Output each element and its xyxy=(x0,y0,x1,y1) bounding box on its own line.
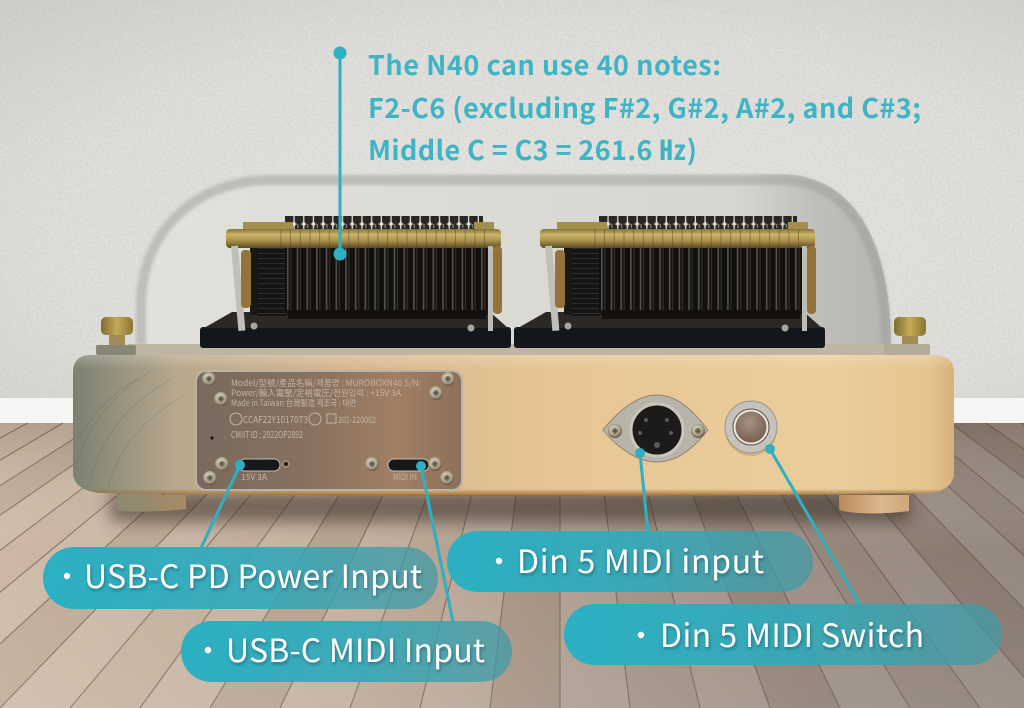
comb mechanism left xyxy=(200,216,511,348)
small holes xyxy=(210,436,290,468)
callout dots xyxy=(235,46,775,471)
wood grain xyxy=(75,372,185,488)
glass base strip xyxy=(128,344,898,356)
background wall xyxy=(0,0,1024,400)
plate printed text: CCAF22Y10170T3 xyxy=(243,412,308,426)
label: Din 5 MIDI input: Din 5 MIDI input xyxy=(517,537,764,583)
label: Din 5 MIDI Switch xyxy=(564,604,1002,665)
clear acrylic dome xyxy=(136,174,891,348)
heading: note range: Middle C = C3 = 261.6 ㎐) xyxy=(368,129,697,168)
label: USB-C PD Power Input: USB-C PD Power Input xyxy=(84,552,422,598)
white baseboard xyxy=(0,398,1024,424)
label: USB-C MIDI Input: USB-C MIDI Input xyxy=(226,626,485,672)
brass thumb screws xyxy=(96,317,930,355)
floor shadow xyxy=(110,492,910,522)
music box product xyxy=(73,174,954,522)
heading: note range: The N40 can use 40 notes: xyxy=(368,44,721,83)
label: USB-C PD Power Input xyxy=(43,547,438,609)
plate printed text: CMIIT ID : 2022OP2892 xyxy=(231,427,303,441)
plate printed text: Model/型號/產品名稱/제품명 : MUROBOXN40 S/N: xyxy=(231,377,421,389)
metal rating plate xyxy=(195,370,463,491)
certification marks xyxy=(230,413,336,425)
callout leader lines xyxy=(201,53,860,622)
heading: note range xyxy=(368,44,921,168)
label: USB-C MIDI Input xyxy=(181,621,512,682)
plate printed text: Power/輸入電壓/定格電圧/전원입력 : +15V 3A xyxy=(231,387,402,399)
heading: note range: F2-C6 (excluding F#2, G#2, A#2, and C#3; xyxy=(368,87,921,126)
plate printed text xyxy=(231,377,421,483)
MIDI switch button xyxy=(725,401,777,456)
plate printed text: Made in Taiwan 台灣製造 제조국 : 대만 xyxy=(231,397,356,409)
wooden floor xyxy=(0,423,1024,708)
Din 5 MIDI socket xyxy=(603,395,708,462)
USB-C ports xyxy=(239,459,429,471)
plate screws xyxy=(202,372,455,485)
wooden feet xyxy=(117,495,909,514)
plate printed text: 201-220062 xyxy=(338,413,376,426)
plate printed text: MIDI IN xyxy=(393,471,417,483)
label: Din 5 MIDI Switch: Din 5 MIDI Switch xyxy=(660,611,924,657)
comb mechanism right xyxy=(514,216,825,348)
label: Din 5 MIDI input xyxy=(447,531,813,592)
plate printed text: 15V 3A xyxy=(241,471,268,483)
wooden case xyxy=(73,355,954,496)
